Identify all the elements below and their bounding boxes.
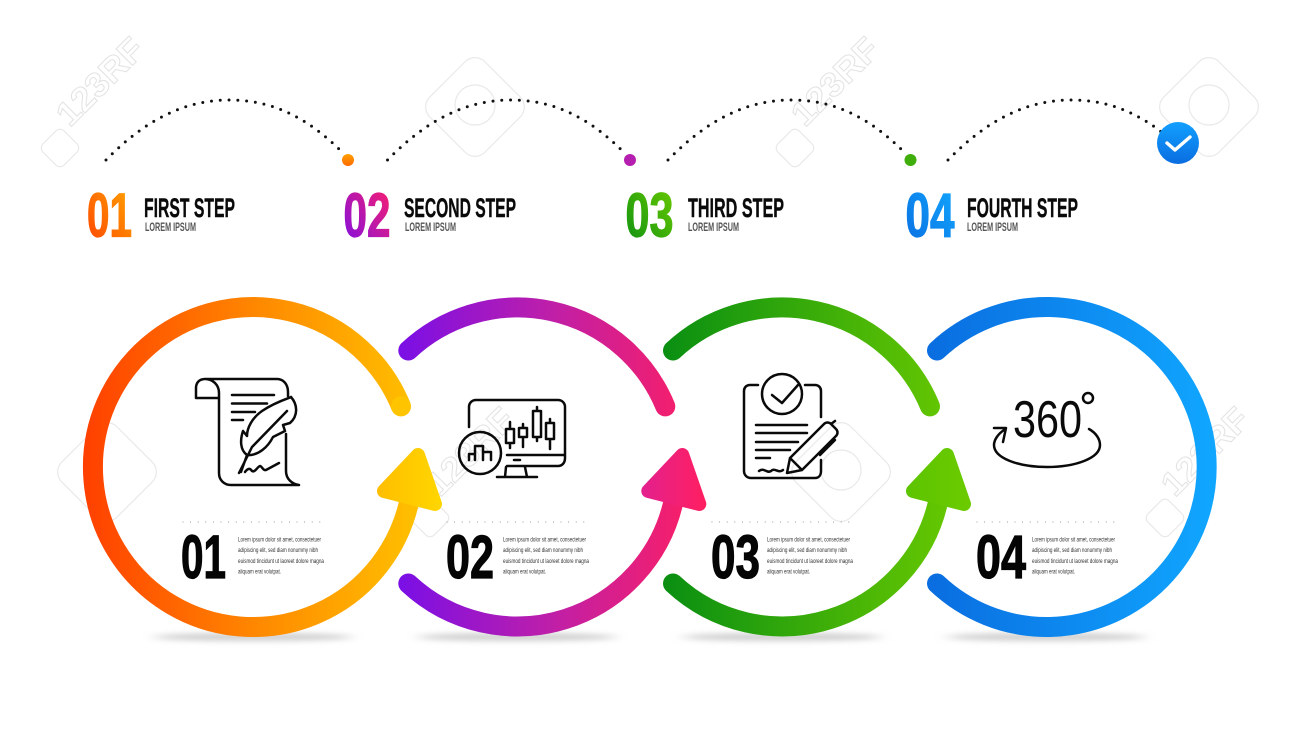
- ring shadows: [153, 633, 1146, 641]
- heading: third step: [626, 182, 784, 250]
- number block 1: Lorem ipsum dolor sit amet, consectetuer: [238, 536, 322, 544]
- number block 1: euismod tincidunt ut laoreet dolore magna: [238, 558, 324, 565]
- heading: first step: LOREM IPSUM: [145, 220, 196, 234]
- number block 2: aliquam erat volutpat.: [503, 568, 546, 576]
- panel: ring 3 green: [673, 308, 964, 626]
- number block 4: euismod tincidunt ut laoreet dolore magna: [1032, 558, 1118, 565]
- number block 1: [181, 522, 325, 591]
- icon: monitor with candlestick chart: [459, 400, 565, 477]
- number block 4: Lorem ipsum dolor sit amet, consectetuer: [1032, 536, 1116, 544]
- number block 2: euismod tincidunt ut laoreet dolore magna: [503, 558, 589, 565]
- heading: second step: [344, 182, 516, 250]
- number block 4: aliquam erat volutpat.: [1032, 568, 1075, 576]
- number block 1: 01: [181, 523, 226, 591]
- heading: second step: 02: [344, 182, 390, 250]
- icon: 360 degree rotation: [994, 391, 1100, 467]
- watermark stamps: 123RF: [49, 30, 152, 134]
- number block 2: 02: [446, 523, 494, 591]
- heading: first step: [87, 182, 235, 250]
- heading: fourth step: [906, 182, 1078, 250]
- step dot 2: [624, 154, 636, 166]
- number block 2: Lorem ipsum dolor sit amet, consectetuer: [503, 536, 587, 544]
- heading: second step: SECOND STEP: [404, 193, 516, 223]
- heading: second step: LOREM IPSUM: [405, 220, 456, 234]
- number block 3: aliquam erat volutpat.: [767, 568, 810, 576]
- number block 3: 03: [711, 523, 760, 591]
- icon: blue check badge: [1157, 122, 1199, 164]
- number block 1: adipiscing elit, sed diam nonummy nibh: [238, 547, 318, 554]
- number block 3: adipiscing elit, sed diam nonummy nibh: [767, 547, 847, 554]
- heading: third step: THIRD STEP: [688, 193, 784, 223]
- panel: ring 1 orange: [93, 307, 435, 627]
- watermark stamps: 123RF: [1154, 400, 1257, 504]
- heading: fourth step: LOREM IPSUM: [967, 220, 1018, 234]
- watermark stamps: 123RF: [419, 400, 522, 504]
- number block 4: adipiscing elit, sed diam nonummy nibh: [1032, 547, 1112, 554]
- number block 4: [976, 522, 1119, 591]
- step dot 1: [342, 154, 354, 166]
- heading: third step: 03: [626, 182, 674, 250]
- number block 2: [446, 522, 589, 591]
- panel: ring 2 purple-pink: [408, 308, 699, 626]
- number block 3: euismod tincidunt ut laoreet dolore magna: [767, 558, 853, 565]
- number block 3: Lorem ipsum dolor sit amet, consectetuer: [767, 536, 851, 544]
- heading: fourth step: FOURTH STEP: [967, 193, 1078, 223]
- number block 4: 04: [976, 523, 1026, 591]
- heading: first step: FIRST STEP: [144, 193, 235, 223]
- panel: ring 4 blue: [937, 307, 1207, 627]
- number block 3: [711, 522, 854, 591]
- number block 1: aliquam erat volutpat.: [238, 568, 281, 576]
- icon: 360 degree rotation: 360: [1013, 391, 1082, 449]
- icon: scroll with feather: [196, 379, 299, 485]
- watermark stamps: [39, 30, 1264, 539]
- watermark stamps: 123RF: [784, 30, 887, 134]
- dotted connector arcs: [106, 100, 1184, 160]
- step dot 3: [904, 154, 916, 166]
- heading: fourth step: 04: [906, 182, 955, 250]
- heading: first step: 01: [87, 182, 132, 250]
- number block 2: adipiscing elit, sed diam nonummy nibh: [503, 547, 583, 554]
- heading: third step: LOREM IPSUM: [688, 220, 739, 234]
- icon: document with check and pen: [744, 374, 838, 478]
